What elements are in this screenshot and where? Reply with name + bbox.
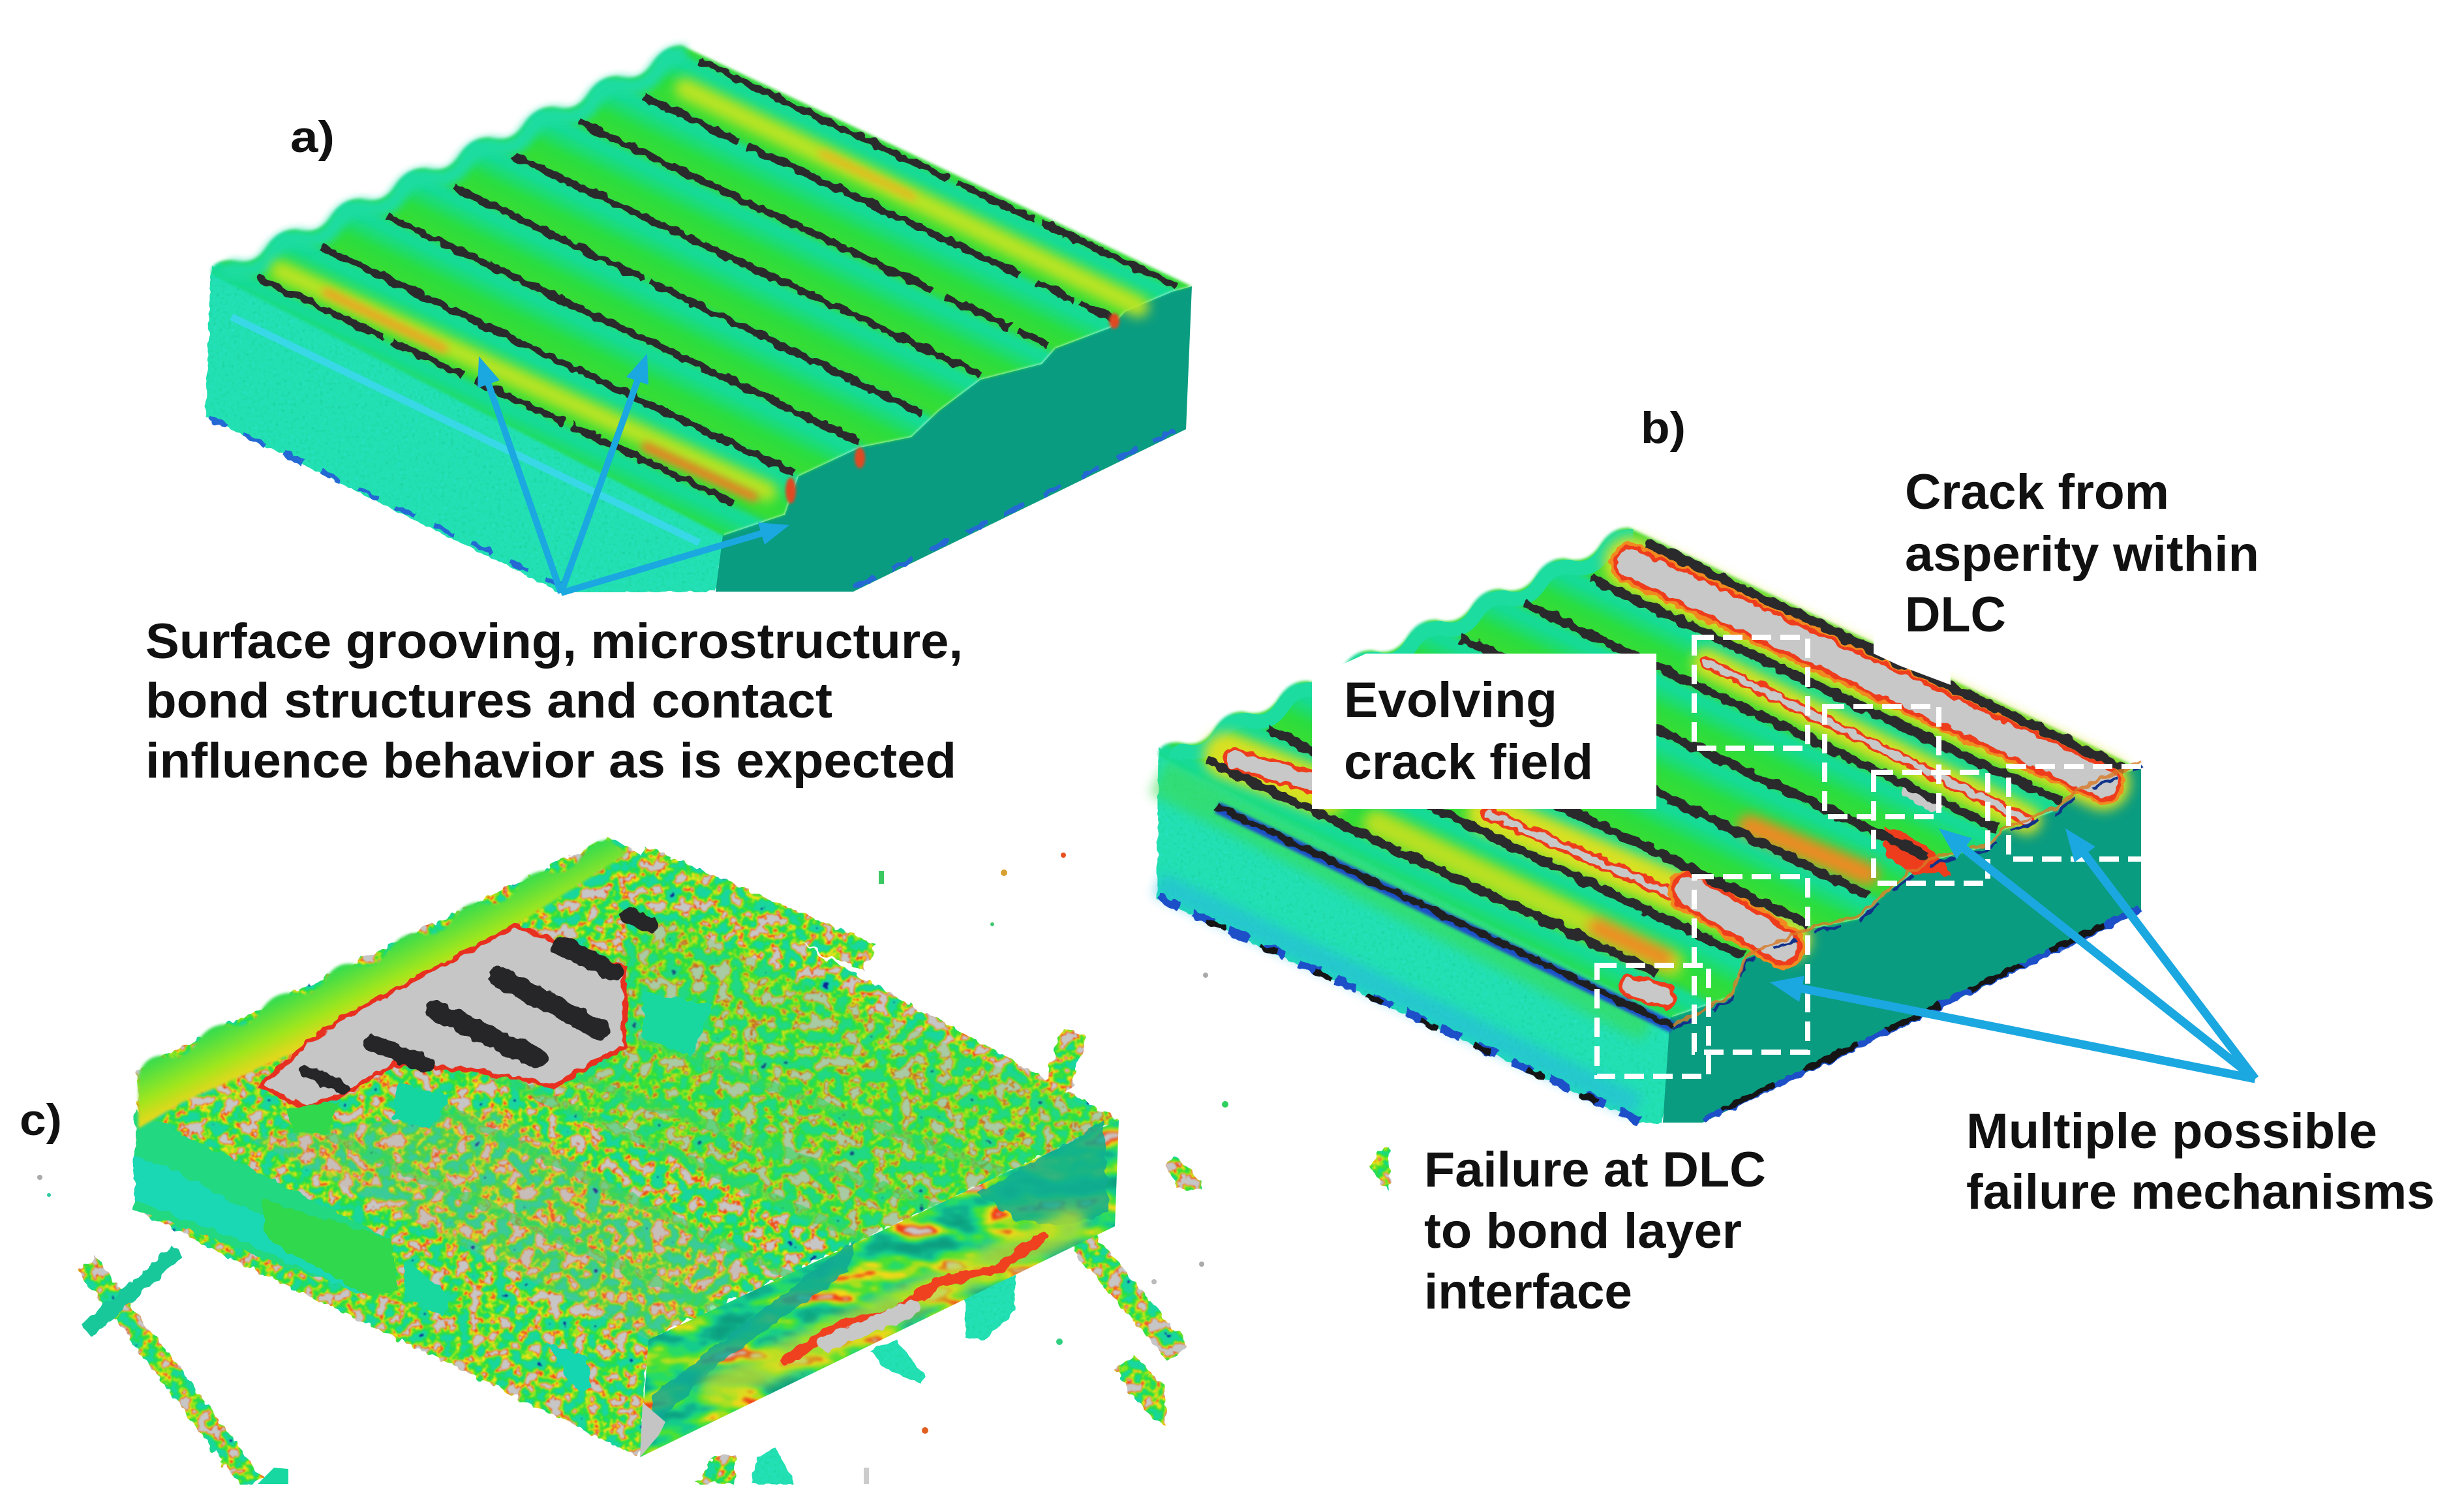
right face of block b — [1663, 768, 2141, 1123]
ridge streaks c — [326, 1037, 1024, 1318]
callout: crack from asperity: DLC — [1905, 587, 2006, 643]
crack: long back stripe — [1631, 564, 2103, 783]
left face of block b — [1157, 748, 1673, 1123]
dark groove lines a — [259, 61, 1176, 502]
caption a: bond structures and contact — [145, 673, 832, 729]
arrow b1 — [1770, 976, 2255, 1079]
fragment: under right face — [964, 1275, 1016, 1340]
green upper band on left face b — [1159, 776, 1650, 1024]
dark groove lines b — [1206, 543, 2123, 973]
small grey patch — [1908, 791, 1934, 806]
bond layer crack b — [1217, 762, 2141, 1029]
arrow a1 — [478, 356, 561, 593]
callout box: evolving crack field: Evolving — [1344, 673, 1557, 728]
grey-red overlay front left c — [248, 1109, 750, 1340]
smooth green left patch c — [134, 1109, 391, 1295]
bond layer line a — [232, 317, 699, 543]
fragment: left long bar — [78, 1258, 262, 1490]
label a: a) — [290, 112, 335, 162]
grooved top surface b — [1159, 528, 2139, 1018]
arrow b3 — [2065, 828, 2255, 1079]
arrow b2 — [1939, 828, 2255, 1079]
white crop under block a — [163, 592, 1011, 631]
ridge crests a — [228, 54, 686, 277]
fragment: right upper bar — [1043, 1029, 1088, 1095]
panel c: fully failed block — [78, 837, 1202, 1485]
stress halos b — [1226, 564, 2103, 963]
callout: failure at DLC interface: to bond layer — [1424, 1203, 1742, 1259]
left face c — [134, 1068, 648, 1457]
callout: multiple failure mechanisms: failure mechanisms — [1966, 1164, 2435, 1220]
small specks around blocks — [37, 853, 1390, 1484]
fragment: lower blob — [870, 1340, 925, 1384]
fragment: bottom blob 2 — [751, 1448, 795, 1484]
callout: failure at DLC interface — [1424, 1142, 1766, 1320]
fragment: right lower bar — [1073, 1233, 1187, 1361]
caption a — [145, 614, 963, 789]
crack: front block end — [1690, 890, 1783, 946]
fragment: left cross bar — [82, 1245, 183, 1337]
teal patches c — [134, 1155, 590, 1389]
green chunks near spall c — [287, 991, 711, 1135]
top surface c — [138, 838, 1119, 1340]
green overlay back right c — [522, 913, 1119, 1246]
block b lower edges — [1158, 897, 2141, 1121]
callout: multiple failure mechanisms — [1966, 1104, 2435, 1220]
arrows b — [1770, 828, 2255, 1079]
block a lower edge — [207, 417, 1186, 587]
left face of block a — [205, 265, 726, 593]
front debris — [78, 1157, 1202, 1490]
ridge crests b — [1176, 536, 1633, 759]
callout: multiple failure mechanisms: Multiple possible — [1966, 1104, 2377, 1159]
groove end hot spots a — [785, 313, 1119, 504]
cyan lower band on left face b — [1159, 884, 1637, 1106]
callout box: evolving crack field: crack field — [1344, 734, 1593, 790]
right face crack band c — [718, 1226, 1070, 1389]
label b: b) — [1641, 403, 1686, 453]
panel b: evolving crack field block — [1157, 528, 2141, 1123]
callout box: evolving crack field — [1312, 654, 1656, 809]
chip next to failure caption — [1370, 1148, 1390, 1190]
stressed yellow stripes a — [280, 89, 1138, 497]
crop white below panel c — [0, 1485, 979, 1512]
callout: crack from asperity — [1905, 464, 2259, 643]
white notch at back edge b — [1874, 607, 1951, 685]
crack: front corner — [1631, 986, 1665, 997]
red failure patch — [1884, 826, 1951, 874]
fragment: bottom left chip — [258, 1468, 288, 1484]
fragment: right blob upper — [1166, 1157, 1202, 1190]
white dashed boxes — [1597, 637, 2141, 1076]
arrow a2 — [561, 354, 648, 593]
right face c — [640, 1120, 1119, 1457]
arrow a3 — [561, 522, 789, 593]
fragment: right blob lower — [1114, 1355, 1166, 1427]
corner grey c — [640, 1402, 665, 1457]
grooved top surface a — [211, 46, 1192, 536]
fragment: bottom blob 1 — [695, 1455, 735, 1484]
debris fragments behind block — [634, 847, 1187, 1384]
callout: crack from asperity: Crack from — [1905, 464, 2169, 520]
crest band c — [138, 839, 626, 1128]
right face teal blocks c — [652, 1122, 1109, 1429]
crack stripes b — [1234, 564, 2103, 997]
exposed dark grooves c — [307, 915, 650, 1088]
crack: front left stripe — [1234, 759, 1331, 788]
caption a: influence behavior as is expected — [145, 733, 956, 789]
grey spalled region c — [261, 926, 624, 1109]
label c: c) — [20, 1095, 62, 1145]
callout: failure at DLC interface: interface — [1424, 1264, 1632, 1320]
crack: upper thin stripe — [1707, 663, 2027, 820]
caption a: Surface grooving, microstructure, — [145, 614, 963, 669]
crack: middle thin stripe — [1487, 813, 1722, 916]
callout: crack from asperity: asperity within — [1905, 526, 2259, 582]
right face of block a — [716, 286, 1192, 592]
panel a: grooved DLC block — [163, 46, 1192, 631]
arrows a — [478, 354, 789, 593]
fragment: top right bar — [634, 847, 875, 971]
callout: failure at DLC interface: Failure at DLC — [1424, 1142, 1766, 1198]
